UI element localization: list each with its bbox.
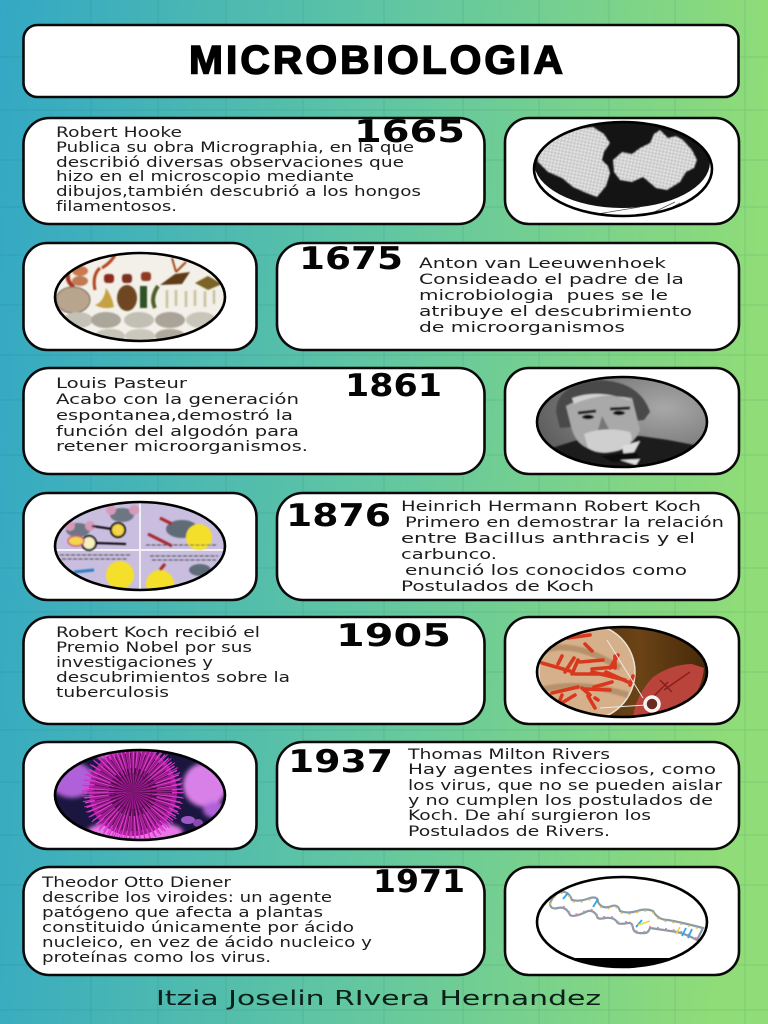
description: microbiologia pues se le — [419, 288, 668, 304]
description: Robert Koch recibió el — [56, 625, 260, 641]
image: specimens plate — [54, 252, 226, 343]
image: spiky purple virus — [50, 746, 227, 844]
description: Thomas Milton Rivers — [407, 747, 610, 763]
card — [505, 867, 739, 975]
description: hizo en el microscopio mediante — [56, 169, 354, 185]
year 1675: 1675 — [299, 241, 403, 277]
card — [505, 368, 739, 474]
description: carbunco. — [401, 547, 497, 563]
year 1665: 1665 — [354, 114, 465, 150]
year 1876: 1876 — [286, 498, 391, 534]
author name: Itzia Joselin RIvera Hernandez — [156, 986, 601, 1010]
card — [24, 742, 256, 849]
description — [41, 875, 373, 966]
description: de microorganismos — [419, 320, 625, 336]
description: Premio Nobel por sus — [56, 640, 252, 656]
description: tuberculosis — [56, 685, 169, 701]
description: enunció los conocidos como — [405, 563, 687, 579]
description — [56, 125, 421, 215]
image: tuberculosis bacilli and lung — [536, 624, 708, 720]
card — [505, 118, 739, 224]
panel: Leeuwenhoek image — [24, 243, 256, 350]
description: dibujos,también descubrió a los hongos — [56, 184, 421, 200]
panel: Pasteur image — [505, 368, 739, 474]
image: portrait of Pasteur — [536, 376, 710, 470]
description: patógeno que afecta a plantas — [42, 905, 323, 921]
description: los virus, que no se pueden aislar — [408, 778, 722, 794]
description: y no cumplen los postulados de — [408, 793, 713, 809]
description: investigaciones y — [56, 655, 214, 671]
year 1937: 1937 — [288, 744, 393, 780]
description: Anton van Leeuwenhoek — [419, 256, 667, 272]
description: descubrimientos sobre la — [56, 670, 290, 686]
description: espontanea,demostró la — [56, 408, 293, 424]
description — [56, 376, 308, 455]
image: Koch postulates diagram — [54, 501, 226, 598]
card — [277, 493, 739, 600]
panel: 1876 Robert Koch — [277, 493, 739, 600]
description: Hay agentes infecciosos, como — [408, 762, 716, 778]
description: Postulados de Rivers. — [408, 824, 610, 840]
panel: 1665 Robert Hooke — [24, 114, 484, 224]
card — [24, 617, 484, 724]
image: viroid RNA strand — [536, 876, 708, 970]
image: micrographia cork drawing — [532, 120, 714, 218]
description: atribuye el descubrimiento — [419, 304, 692, 320]
description: filamentosos. — [56, 199, 177, 215]
panel: viroid image — [505, 867, 739, 975]
description: Primero en demostrar la relación — [405, 515, 724, 531]
card — [277, 243, 739, 350]
title panel — [24, 25, 738, 97]
card — [277, 742, 739, 849]
description: Acabo con la generación — [56, 392, 299, 408]
description: constituido únicamente por ácido — [42, 920, 354, 936]
description: Heinrich Hermann Robert Koch — [401, 499, 701, 515]
description — [56, 625, 290, 701]
card — [24, 867, 484, 975]
description: Robert Hooke — [56, 125, 182, 141]
panel: Hooke image — [505, 116, 739, 224]
panel: virus image — [24, 742, 256, 849]
description — [401, 499, 724, 595]
description — [407, 747, 722, 840]
description: nucleico, en vez de ácido nucleico y — [42, 935, 373, 951]
panel: 1971 Theodor Otto Diener — [24, 864, 484, 975]
description: Postulados de Koch — [401, 579, 594, 595]
description: describió diversas observaciones que — [56, 155, 404, 171]
description: proteínas como los virus. — [42, 950, 271, 966]
card — [24, 368, 484, 474]
description: entre Bacillus anthracis y el — [401, 531, 695, 547]
description — [419, 256, 692, 336]
panel: 1861 Louis Pasteur — [24, 368, 484, 474]
description: describe los viroides: un agente — [42, 890, 332, 906]
card — [24, 118, 484, 224]
year 1861: 1861 — [345, 368, 442, 404]
panel: 1905 Nobel prize — [24, 617, 484, 724]
description: Consideado el padre de la — [419, 272, 684, 288]
year 1971: 1971 — [373, 864, 465, 900]
description: retener microorganismos. — [56, 439, 308, 455]
title: MICROBIOLOGIA — [189, 38, 566, 82]
panel: tuberculosis image — [505, 617, 739, 724]
card — [24, 493, 256, 600]
panel: 1675 Anton van Leeuwenhoek — [277, 241, 739, 350]
card — [505, 617, 739, 724]
year 1905: 1905 — [336, 618, 451, 654]
title box — [24, 25, 738, 97]
description: Koch. De ahí surgieron los — [408, 808, 651, 824]
description: función del algodón para — [56, 424, 299, 440]
panel: Koch postulates image — [24, 493, 256, 600]
description: Publica su obra Micrographia, en la que — [56, 140, 414, 156]
description: Theodor Otto Diener — [41, 875, 231, 891]
card — [24, 243, 256, 350]
description: Louis Pasteur — [56, 376, 187, 392]
panel: 1937 Thomas Milton Rivers — [277, 742, 739, 849]
